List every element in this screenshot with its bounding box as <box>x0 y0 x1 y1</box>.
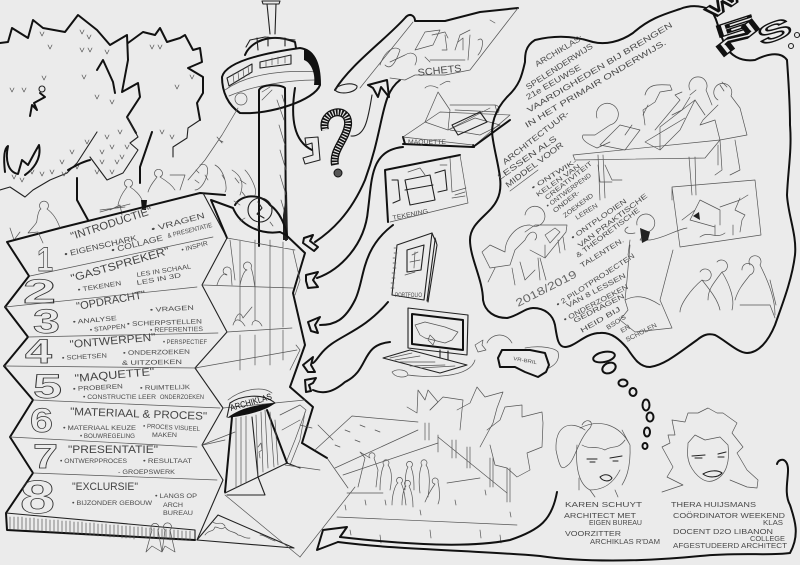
step 2 gastspreker: 2 <box>23 273 56 311</box>
maquette model: MAQUETTE <box>408 140 446 146</box>
step 2 gastspreker <box>23 245 192 311</box>
step 8 excursie: • BIJZONDER GEBOUW <box>72 500 153 507</box>
title WENS: S <box>753 11 796 52</box>
blob text block: MIDDEL VOOR <box>504 140 565 190</box>
caption: Karen Schuyt <box>564 502 660 546</box>
step 8 excursie: BUREAU <box>163 510 193 517</box>
Euromast tower <box>188 1 320 246</box>
step 4 ontwerpen: "ONTWERPEN" <box>69 332 156 351</box>
caption: Thera Huijsmans: AFGESTUDEERD ARCHITECT <box>673 543 788 550</box>
blob text block: ONDER- <box>552 189 581 215</box>
step 3 opdracht <box>33 289 204 341</box>
step 5 maquette: 5 <box>33 368 62 406</box>
blob text block: VAARDIGHEDEN BIJ BRENGEN <box>525 20 674 115</box>
blob text block: VAN 8 LESSEN <box>566 273 627 310</box>
blob text block: IN HET PRIMAIR ONDERWIJS. <box>523 38 668 130</box>
blob text block: 2018/2019 <box>514 269 579 310</box>
step 6 materiaal en proces: MAKEN <box>152 432 177 439</box>
blob text block: ARCHITECTUUR- <box>501 109 571 167</box>
step 1 introductie: • EIGENSCHARK <box>63 233 138 259</box>
big arrow along bottom <box>317 460 796 560</box>
computer with drawing <box>383 308 475 377</box>
step 1 introductie: • VRAGEN <box>150 211 206 234</box>
step 6 materiaal en proces: 6 <box>30 402 53 440</box>
accordion panel with 8 lesson steps <box>4 193 227 540</box>
blob text block: TALENTEN. <box>579 237 626 270</box>
blob text block: KELEN VAN <box>535 163 582 199</box>
blob text block: HEID BIJ <box>580 306 622 335</box>
step 2 gastspreker: "GASTSPREKER" <box>70 245 171 285</box>
caption: Thera Huijsmans: KLAS <box>763 520 783 527</box>
step 4 ontwerpen: • SCHETSEN <box>62 353 107 362</box>
blob text block <box>496 20 674 344</box>
trees with crowd behind the panel <box>0 15 256 240</box>
step 3 opdracht: • STAPPEN <box>89 323 126 334</box>
blob text block: • ONDERZOEKEN <box>563 284 630 324</box>
caption: Thera Huijsmans: DOCENT D2O LIBANON <box>673 529 773 536</box>
step 2 gastspreker: LES IN SCHAAL <box>136 263 192 279</box>
maquette model <box>403 81 510 147</box>
blob text block: SPELENDERWIJS <box>524 42 595 92</box>
arrow from tower to question mark <box>293 88 320 164</box>
arrow from VR goggles <box>475 335 512 352</box>
step 3 opdracht: "OPDRACHT" <box>75 289 147 313</box>
children at the table <box>573 77 747 200</box>
blob text block: ZOEKEND <box>562 192 595 220</box>
portrait: Karen Schuyt <box>556 421 630 497</box>
figures sitting on and below the panel <box>28 201 175 552</box>
paved entrance <box>197 465 320 557</box>
thought blob outline <box>470 6 795 367</box>
step 1 introductie: 1 <box>37 241 53 279</box>
scroll: schets <box>335 8 518 93</box>
step 8 excursie: 8 <box>20 471 55 523</box>
step 7 presentatie: - GROEPSWERK <box>118 469 176 476</box>
step 8 excursie: • LANGS OP <box>155 493 197 500</box>
step 6 materiaal en proces: • BOUWREGELING <box>80 433 135 440</box>
step 7 presentatie: • ONTWERPPROCES <box>60 458 128 465</box>
blob text block: • ONTWERPEND <box>545 172 593 210</box>
step 2 gastspreker: LES IN 3D <box>136 272 182 287</box>
blob text block: • 2 PILOTPROJECTEN <box>555 253 636 309</box>
step 4 ontwerpen: & UITZOEKEN <box>122 359 182 367</box>
question mark <box>324 112 348 177</box>
blob text block: 21e EEUWSE <box>524 63 583 102</box>
title WENS <box>703 0 800 61</box>
step 3 opdracht: • VRAGEN <box>150 305 194 314</box>
blob text block: BSO'S <box>605 313 628 332</box>
step 4 ontwerpen: 4 <box>25 333 52 371</box>
step 3 opdracht: • REFERENTIES <box>150 326 204 334</box>
step 1 introductie: • INSPIR <box>181 240 209 254</box>
title WENS: N <box>712 15 764 61</box>
portfolio book <box>391 233 437 302</box>
child drawing at small desk <box>482 206 567 285</box>
blob text block: SCHOLEN <box>625 322 658 344</box>
title WENS: E <box>713 11 757 42</box>
step 3 opdracht: 3 <box>33 303 60 341</box>
step 5 maquette: "MAQUETTE" <box>74 366 155 385</box>
blob text block: & THEORETISCHE <box>575 207 642 260</box>
step 5 maquette <box>33 366 204 406</box>
step 8 excursie: ARCH <box>163 502 183 509</box>
teacher pointing at a board, with seated children <box>620 180 776 332</box>
step 7 presentatie <box>33 438 192 476</box>
step 8 excursie: "EXCLURSIE" <box>72 481 138 493</box>
caption: Thera Huijsmans: THERA HUIJSMANS <box>671 502 756 509</box>
step 6 materiaal en proces <box>30 402 207 440</box>
step 5 maquette: • CONSTRUCTIE LEER <box>83 394 156 401</box>
step 7 presentatie: "PRESENTATIE" <box>68 444 158 456</box>
trees and people on the plaza <box>300 387 543 557</box>
arrow to sketch <box>351 80 389 136</box>
step 8 excursie <box>20 471 197 523</box>
caption: Karen Schuyt: EIGEN BUREAU <box>589 520 642 527</box>
drawing: tekening <box>385 155 468 222</box>
blob text block: EN <box>620 324 632 335</box>
step 3 opdracht: • SCHERPSTELLEN <box>127 318 202 328</box>
thought bubbles <box>592 350 654 449</box>
step 5 maquette: • RUIMTELIJK <box>140 384 191 392</box>
blob text block: • ONTPLOOIEN <box>570 198 628 242</box>
step 2 gastspreker: • TEKENEN <box>77 280 122 294</box>
blob text block: • ONTWIK- <box>530 158 578 192</box>
blob text block: GEDRAGEN <box>573 293 626 325</box>
blob text block: ARCHIKLAS: <box>533 33 584 69</box>
door with ARCHIKLAS sign: ARCHIKLAS <box>229 391 273 413</box>
blob text block: CREATIVITEIT <box>544 160 594 202</box>
portfolio book: PORTFOLIO <box>395 292 422 299</box>
caption: Karen Schuyt: VOORZITTER <box>565 531 621 538</box>
VR goggles: VR-BRIL <box>513 356 538 366</box>
blob text block: LEREN <box>574 202 600 222</box>
step 1 introductie: "INTRODUCTIE" <box>69 205 154 243</box>
blob text block: LESSEN ALS <box>496 134 558 182</box>
step 4 ontwerpen: • ONDERZOEKEN <box>123 349 190 357</box>
caption: Karen Schuyt: KAREN SCHUYT <box>565 502 643 509</box>
step 5 maquette: • PROBEREN <box>73 383 123 393</box>
step 5 maquette: ONDERZOEKEN <box>160 394 204 401</box>
step 7 presentatie: 7 <box>33 438 58 476</box>
curved arrows back to the tower <box>303 80 403 392</box>
step 1 introductie: • COLLAGE <box>110 233 164 255</box>
caption: Thera Huijsmans <box>671 502 788 550</box>
step 6 materiaal en proces: • PROCES VISUEEL <box>143 423 201 433</box>
step 6 materiaal en proces: "MATERIAAL & PROCES" <box>70 406 207 423</box>
step 1 introductie: & PRESENTATIE <box>167 222 214 240</box>
blob text block: VAN PRAKTISCHE <box>577 193 649 250</box>
step 7 presentatie: • RESULTAAT <box>143 458 192 465</box>
step 4 ontwerpen <box>25 332 207 371</box>
caption: Thera Huijsmans: COLLEGE <box>750 536 785 543</box>
step 4 ontwerpen: • PERSPECTIEF <box>163 339 207 346</box>
caption: Karen Schuyt: ARCHITECT MET <box>564 513 637 520</box>
caption: Thera Huijsmans: COÖRDINATOR WEEKEND <box>673 512 785 520</box>
scroll: schets: SCHETS <box>417 63 462 79</box>
portrait: Thera Huijsmans <box>662 408 758 492</box>
caption: Karen Schuyt: ARCHIKLAS R'DAM <box>590 539 660 546</box>
step 3 opdracht: • ANALYSE <box>73 315 118 326</box>
drawing: tekening: TEKENING <box>392 208 429 222</box>
right folded wall with clock <box>195 192 348 488</box>
step 1 introductie <box>37 205 214 279</box>
step 6 materiaal en proces: • MATERIAAL KEUZE <box>63 425 137 432</box>
door with ARCHIKLAS sign <box>203 389 306 495</box>
VR goggles <box>498 347 558 377</box>
